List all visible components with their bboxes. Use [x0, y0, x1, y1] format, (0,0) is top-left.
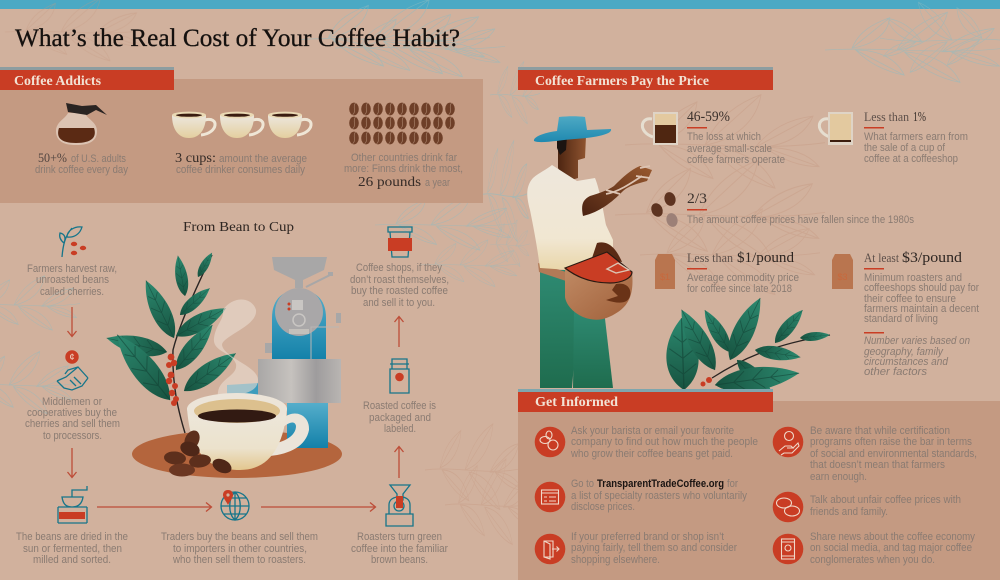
icon: $1 bag [655, 254, 675, 289]
flow step: packaged: Roasted coffee is [363, 400, 436, 412]
arrow [261, 502, 376, 512]
illustration: farmer [527, 116, 652, 388]
stat: less than $1 [655, 250, 799, 295]
stat: 46-59 percent [642, 109, 785, 166]
flow step: middlemen: cooperatives buy the [27, 407, 117, 419]
icon: cup mostly dark [642, 112, 678, 145]
roaster machine [227, 257, 341, 448]
flow step: traders: to importers in other countries, [173, 543, 307, 555]
coffee cup [270, 414, 309, 456]
icon: coffee bag [390, 359, 409, 393]
stat: at least $3: At least [864, 250, 899, 265]
stat: less than 1 percent: What farmers earn from [864, 131, 968, 143]
icon: $1 bag: $1 [660, 272, 670, 282]
icon: speech bubbles [773, 492, 803, 522]
stat: at least $3: Minimum roasters and [864, 272, 962, 284]
icon: three cups [172, 112, 311, 138]
tip: certification: that doesn’t mean that farmers [810, 459, 945, 471]
plate [132, 430, 342, 478]
stat: less than 1 percent: 1% [913, 110, 926, 125]
stat: less than 1 percent: coffee at a coffeeshop [864, 153, 958, 165]
flow step: farmers harvest: called cherries. [40, 286, 104, 298]
tip: share news [773, 531, 976, 566]
icon: to-go cup [388, 227, 412, 257]
arrow [394, 316, 404, 347]
text: 50 percent: 50+% [38, 150, 67, 165]
stat: less than $1: $1/pound [737, 250, 794, 266]
text: finns: more: Finns drink the most, [344, 163, 463, 175]
stat: at least $3: coffeeshops should pay for [864, 282, 979, 294]
flow step: roasters: Roasters turn green [357, 531, 442, 543]
stat: 46-59 percent: average small-scale [687, 143, 772, 155]
icon: cup nearly empty [819, 112, 853, 145]
stat: 2/3: 2/3 [687, 191, 707, 207]
flow step: farmers harvest: Farmers harvest raw, [27, 263, 117, 275]
text: finns: 26 pounds [358, 175, 421, 190]
tip: certification [773, 425, 977, 483]
icon: phone [773, 534, 803, 564]
flow step: traders: who then sell them to roasters. [172, 554, 306, 566]
top bar [0, 0, 1000, 9]
flow step: coffee shops: buy the roasted coffee [351, 285, 448, 297]
text: 50 percent [35, 150, 129, 176]
icon: grinder [58, 486, 87, 523]
tip: transparent trade: disclose prices. [571, 501, 635, 513]
panel: get informed [518, 401, 1000, 580]
heading: coffee farmers [518, 67, 773, 90]
flow step: traders [161, 490, 318, 566]
stat: 46-59 percent: coffee farmers operate [687, 154, 785, 166]
flow step: roasters: coffee into the familiar [351, 543, 448, 555]
icon: roaster machine [386, 485, 413, 526]
stat: at least $3: Number varies based on [864, 335, 970, 347]
hand [606, 284, 630, 303]
tip: if your brand: If your preferred brand or shop isn’t [571, 531, 724, 543]
coffee plant [104, 251, 241, 433]
arm [582, 166, 652, 216]
tip: if your brand: paying fairly, tell them so and consider [571, 542, 737, 554]
icon: globe with pin [221, 490, 249, 520]
stat: at least $3: other factors [864, 366, 928, 378]
icon: coffee bean grid [349, 103, 455, 144]
basket [565, 268, 632, 320]
tip: transparent trade: for [727, 478, 738, 490]
tip: if your brand [535, 531, 737, 566]
icon: sprig [60, 227, 86, 257]
tip: talk about prices: friends and family. [810, 506, 888, 518]
icon: handshake with coin: ¢ [69, 352, 75, 362]
text: finns: a year [425, 177, 450, 189]
tip: certification: of social and environmental standards, [810, 448, 977, 460]
coffee beans [163, 428, 234, 476]
text: 50 percent: drink coffee every day [35, 164, 129, 176]
tip: certification: Be aware that while certification [810, 425, 950, 437]
text: 3 cups: amount the average [219, 153, 307, 165]
stat: at least $3: standard of living [864, 313, 938, 325]
icon: coffee carafe [56, 103, 107, 145]
flow step: farmers harvest: unroasted beans [36, 274, 109, 286]
title: What’s the Real Cost of Your Coffee Habit? [15, 25, 460, 52]
text: finns: Other countries drink far [351, 152, 457, 164]
stat: at least $3 [832, 250, 979, 378]
text: 3 cups: 3 cups: [175, 151, 216, 166]
tip: transparent trade: Go to [571, 478, 594, 490]
arrow [97, 502, 212, 512]
flow step: coffee shops: Coffee shops, if they [356, 262, 443, 274]
flow step: roasters: brown beans. [371, 554, 428, 566]
arrow [68, 448, 76, 478]
stat: at least $3: their coffee to ensure [864, 293, 956, 305]
heading: coffee addicts [0, 67, 174, 90]
flow step: coffee shops [350, 227, 449, 309]
stat: at least $3: geography, family [864, 346, 944, 358]
stat: less than 1 percent: the sale of a cup of [864, 142, 945, 154]
icon: $3 bag: $3 [837, 272, 848, 282]
stat: less than $1: for coffee since late 2018 [687, 283, 792, 295]
other arm [592, 242, 622, 262]
flow step: packaged: packaged and [369, 412, 431, 424]
stat: at least $3: $3/pound [902, 250, 963, 266]
stat: at least $3: farmers maintain a decent [864, 303, 979, 315]
tip: ask your barista [535, 425, 758, 460]
heading: coffee farmers: Coffee Farmers Pay the Price [535, 74, 709, 89]
heading: get informed [518, 389, 773, 412]
tip: talk about prices: Talk about unfair coffee prices with [810, 494, 961, 506]
stat: 46-59 percent: 46-59% [687, 109, 730, 125]
text: finns [344, 152, 463, 190]
arrow [68, 307, 76, 336]
tip: transparent trade [535, 478, 748, 513]
tip: transparent trade: TransparentTradeCoffee.org [597, 478, 724, 490]
stat: 2/3: The amount coffee prices have fallen since the 1980s [687, 214, 914, 226]
tip: ask your barista: company to find out how much the people [571, 436, 758, 448]
stat: less than 1 percent [819, 109, 968, 165]
flow step: beans dried: The beans are dried in the [16, 531, 128, 543]
arrow [394, 446, 404, 478]
flow step: coffee shops: and sell it to you. [363, 297, 435, 309]
illustration: roaster, plant and cup [104, 251, 342, 478]
heading: coffee addicts: Coffee Addicts [14, 74, 102, 89]
flow step: middlemen: cherries and sell them [25, 418, 120, 430]
text: 3 cups: coffee drinker consumes daily [176, 164, 306, 176]
icon: door exit [535, 534, 565, 564]
icon: beans and coin [535, 427, 565, 457]
heading: from bean to cup: From Bean to Cup [183, 220, 294, 235]
flow step: middlemen: Middlemen or [42, 396, 102, 408]
tip: share news: on social media, and tag major coffee [810, 542, 972, 554]
tip: ask your barista: who grow their coffee beans get paid. [570, 448, 733, 460]
flow step: middlemen: to processors. [43, 430, 102, 442]
tip: talk about prices [773, 492, 961, 522]
tip: certification: programs often raise the bar in terms [810, 436, 972, 448]
stat: at least $3: circumstances and [864, 356, 949, 368]
flow step: traders: Traders buy the beans and sell them [161, 531, 318, 543]
tip: transparent trade: a list of specialty roasters who voluntarily [571, 490, 748, 502]
flow step: middlemen [25, 350, 120, 442]
stat: less than $1: Average commodity price [687, 272, 799, 284]
tip: ask your barista: Ask your barista or email your favorite [571, 425, 734, 437]
belt [538, 263, 566, 281]
tip: certification: earn enough. [810, 471, 867, 483]
icon: hand and coin [773, 427, 803, 457]
icon: $3 bag [832, 254, 853, 289]
shirt [527, 165, 613, 270]
tip: share news: Share news about the coffee economy [810, 531, 976, 543]
flow step: beans dried [16, 486, 128, 566]
illustration: lower coffee plant [665, 293, 830, 400]
neck and head [558, 136, 586, 182]
pants [540, 270, 580, 388]
flow step: beans dried: milled and sorted. [33, 554, 111, 566]
flow step: farmers harvest [27, 227, 117, 298]
stat: 2/3 [649, 191, 914, 228]
text: 50 percent: of U.S. adults [71, 153, 126, 165]
flow step: packaged: labeled. [384, 423, 416, 435]
tip: share news: conglomerates when you do. [810, 554, 935, 566]
icon: three beans [649, 191, 679, 228]
flow step: roasters [351, 485, 448, 566]
stat: less than $1: Less than [687, 250, 733, 265]
flow step: beans dried: sun or fermented, then [23, 543, 122, 555]
text: 3 cups [175, 151, 307, 176]
flow step: coffee shops: don’t roast themselves, [350, 274, 449, 286]
panel: coffee addicts [0, 79, 483, 203]
stat: 46-59 percent: The loss at which [687, 131, 761, 143]
icon: list [535, 482, 565, 512]
flow step: packaged [363, 359, 436, 435]
heading: get informed: Get Informed [535, 395, 618, 410]
steam [214, 300, 258, 416]
tip: if your brand: shopping elsewhere. [571, 554, 660, 566]
stat: less than 1 percent: Less than [864, 109, 909, 124]
hat [534, 116, 611, 142]
